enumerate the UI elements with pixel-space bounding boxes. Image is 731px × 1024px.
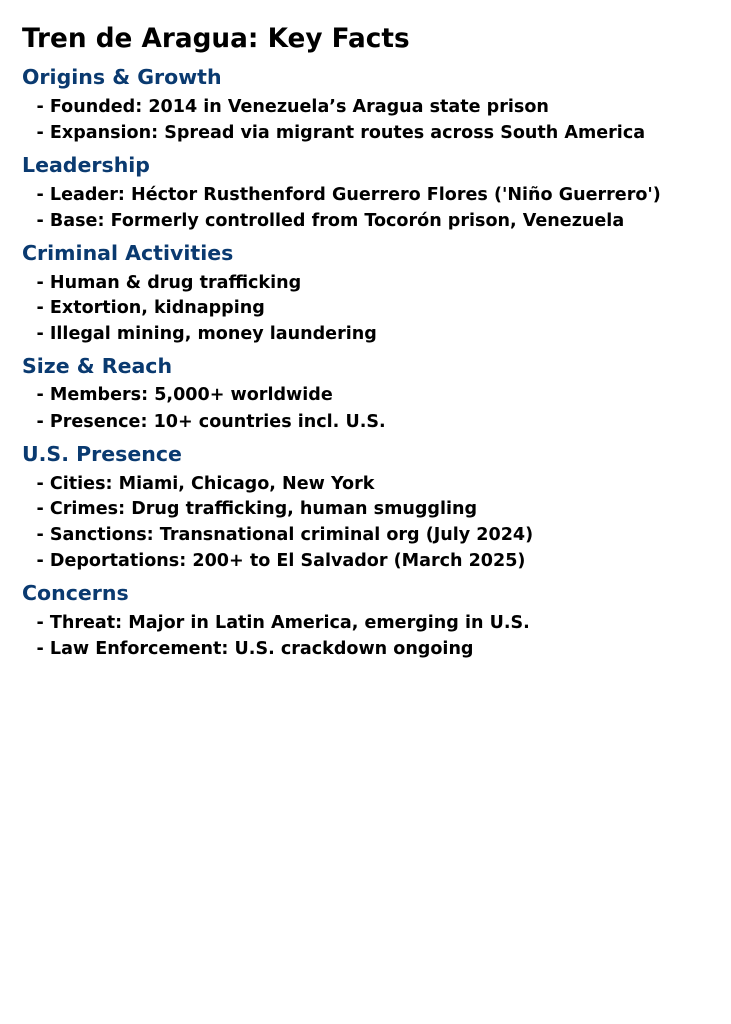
text: base: - Base: Formerly controlled from Tocorón prison, Venezuela (36, 210, 624, 230)
text: founded: - Founded: 2014 in Venezuela’s Aragua state prison (36, 96, 549, 116)
text: expansion: - Expansion: Spread via migrant routes across South America (36, 122, 645, 142)
heading: concerns: Concerns (22, 581, 129, 605)
title: Tren de Aragua: Key Facts (22, 24, 410, 54)
text: threat: - Threat: Major in Latin America, emerging in U.S. (36, 612, 530, 632)
text: leader: - Leader: Héctor Rusthenford Guerrero Flores ('Niño Guerrero') (36, 184, 661, 204)
text: presence: - Presence: 10+ countries incl. U.S. (36, 412, 386, 432)
text: cities: - Cities: Miami, Chicago, New York (36, 474, 374, 494)
text: crimes: - Crimes: Drug trafficking, human smuggling (36, 499, 477, 519)
text: members: - Members: 5,000+ worldwide (36, 385, 333, 405)
heading: us presence: U.S. Presence (22, 442, 182, 466)
text: mining: - Illegal mining, money laundering (36, 324, 377, 344)
text: deportations: - Deportations: 200+ to El Salvador (March 2025) (36, 550, 525, 570)
heading: leadership: Leadership (22, 153, 150, 177)
heading: origins: Origins & Growth (22, 65, 222, 89)
text: extortion: - Extortion, kidnapping (36, 298, 265, 318)
text: sanctions: - Sanctions: Transnational criminal org (July 2024) (36, 524, 533, 544)
heading: size: Size & Reach (22, 354, 172, 378)
heading: criminal activities: Criminal Activities (22, 241, 233, 265)
text: law enforcement: - Law Enforcement: U.S. crackdown ongoing (36, 638, 474, 658)
text: trafficking: - Human & drug trafficking (36, 272, 301, 292)
